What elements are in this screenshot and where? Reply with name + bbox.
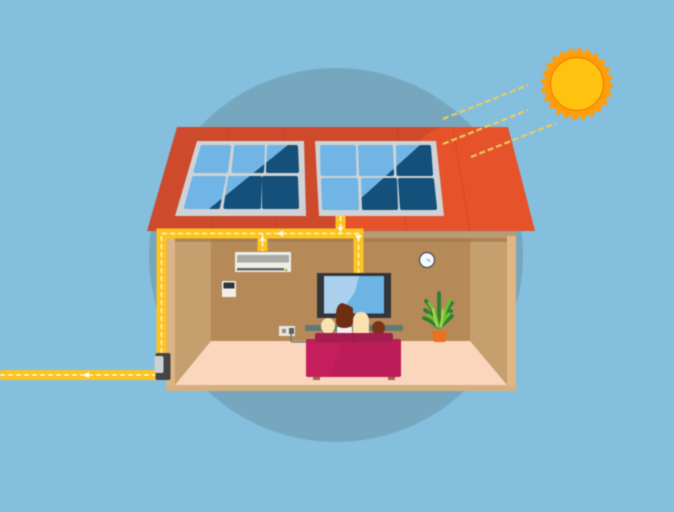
left wall	[175, 238, 211, 385]
back wall	[211, 238, 470, 341]
sofa body	[306, 339, 401, 377]
sofa	[306, 333, 401, 380]
leaves	[424, 293, 452, 327]
dashed current line	[0, 216, 358, 375]
solar panel left	[175, 141, 306, 216]
panel cells shaded	[186, 147, 297, 207]
air conditioner	[235, 252, 291, 272]
ceiling shadow	[175, 238, 507, 242]
wall clock	[420, 252, 434, 268]
child head right	[372, 321, 385, 335]
television	[317, 273, 391, 318]
roof	[147, 127, 535, 231]
sun rays	[443, 85, 556, 157]
roof seams	[212, 127, 470, 230]
panel cells light	[322, 147, 435, 208]
child head left	[321, 318, 335, 334]
sun	[543, 50, 611, 118]
panel cells shaded	[360, 147, 435, 208]
thermostat	[222, 281, 236, 297]
right wall	[470, 238, 507, 385]
family on sofa	[321, 303, 385, 335]
current arrows	[83, 227, 362, 378]
top beam	[166, 232, 516, 238]
sofa legs	[313, 376, 320, 380]
infographic: solar powered house	[0, 47, 614, 442]
panel cells light	[186, 147, 297, 207]
outer frame	[166, 232, 516, 391]
pot	[432, 331, 447, 342]
house interior	[166, 232, 516, 391]
woman head	[353, 312, 369, 333]
sofa back	[315, 333, 393, 342]
yellow power cables	[0, 216, 358, 375]
background circle	[149, 68, 523, 442]
solar panel right	[315, 141, 444, 216]
collar	[337, 327, 352, 334]
television stand	[305, 325, 403, 331]
left frame	[166, 238, 175, 386]
man head	[336, 303, 353, 328]
floor	[175, 341, 507, 385]
screen glare	[324, 276, 359, 314]
right frame	[507, 236, 516, 386]
power outlet	[279, 326, 306, 342]
inverter	[154, 353, 170, 380]
sunlit roof area	[338, 127, 535, 231]
plant	[424, 293, 452, 342]
sofa highlight	[306, 342, 342, 377]
